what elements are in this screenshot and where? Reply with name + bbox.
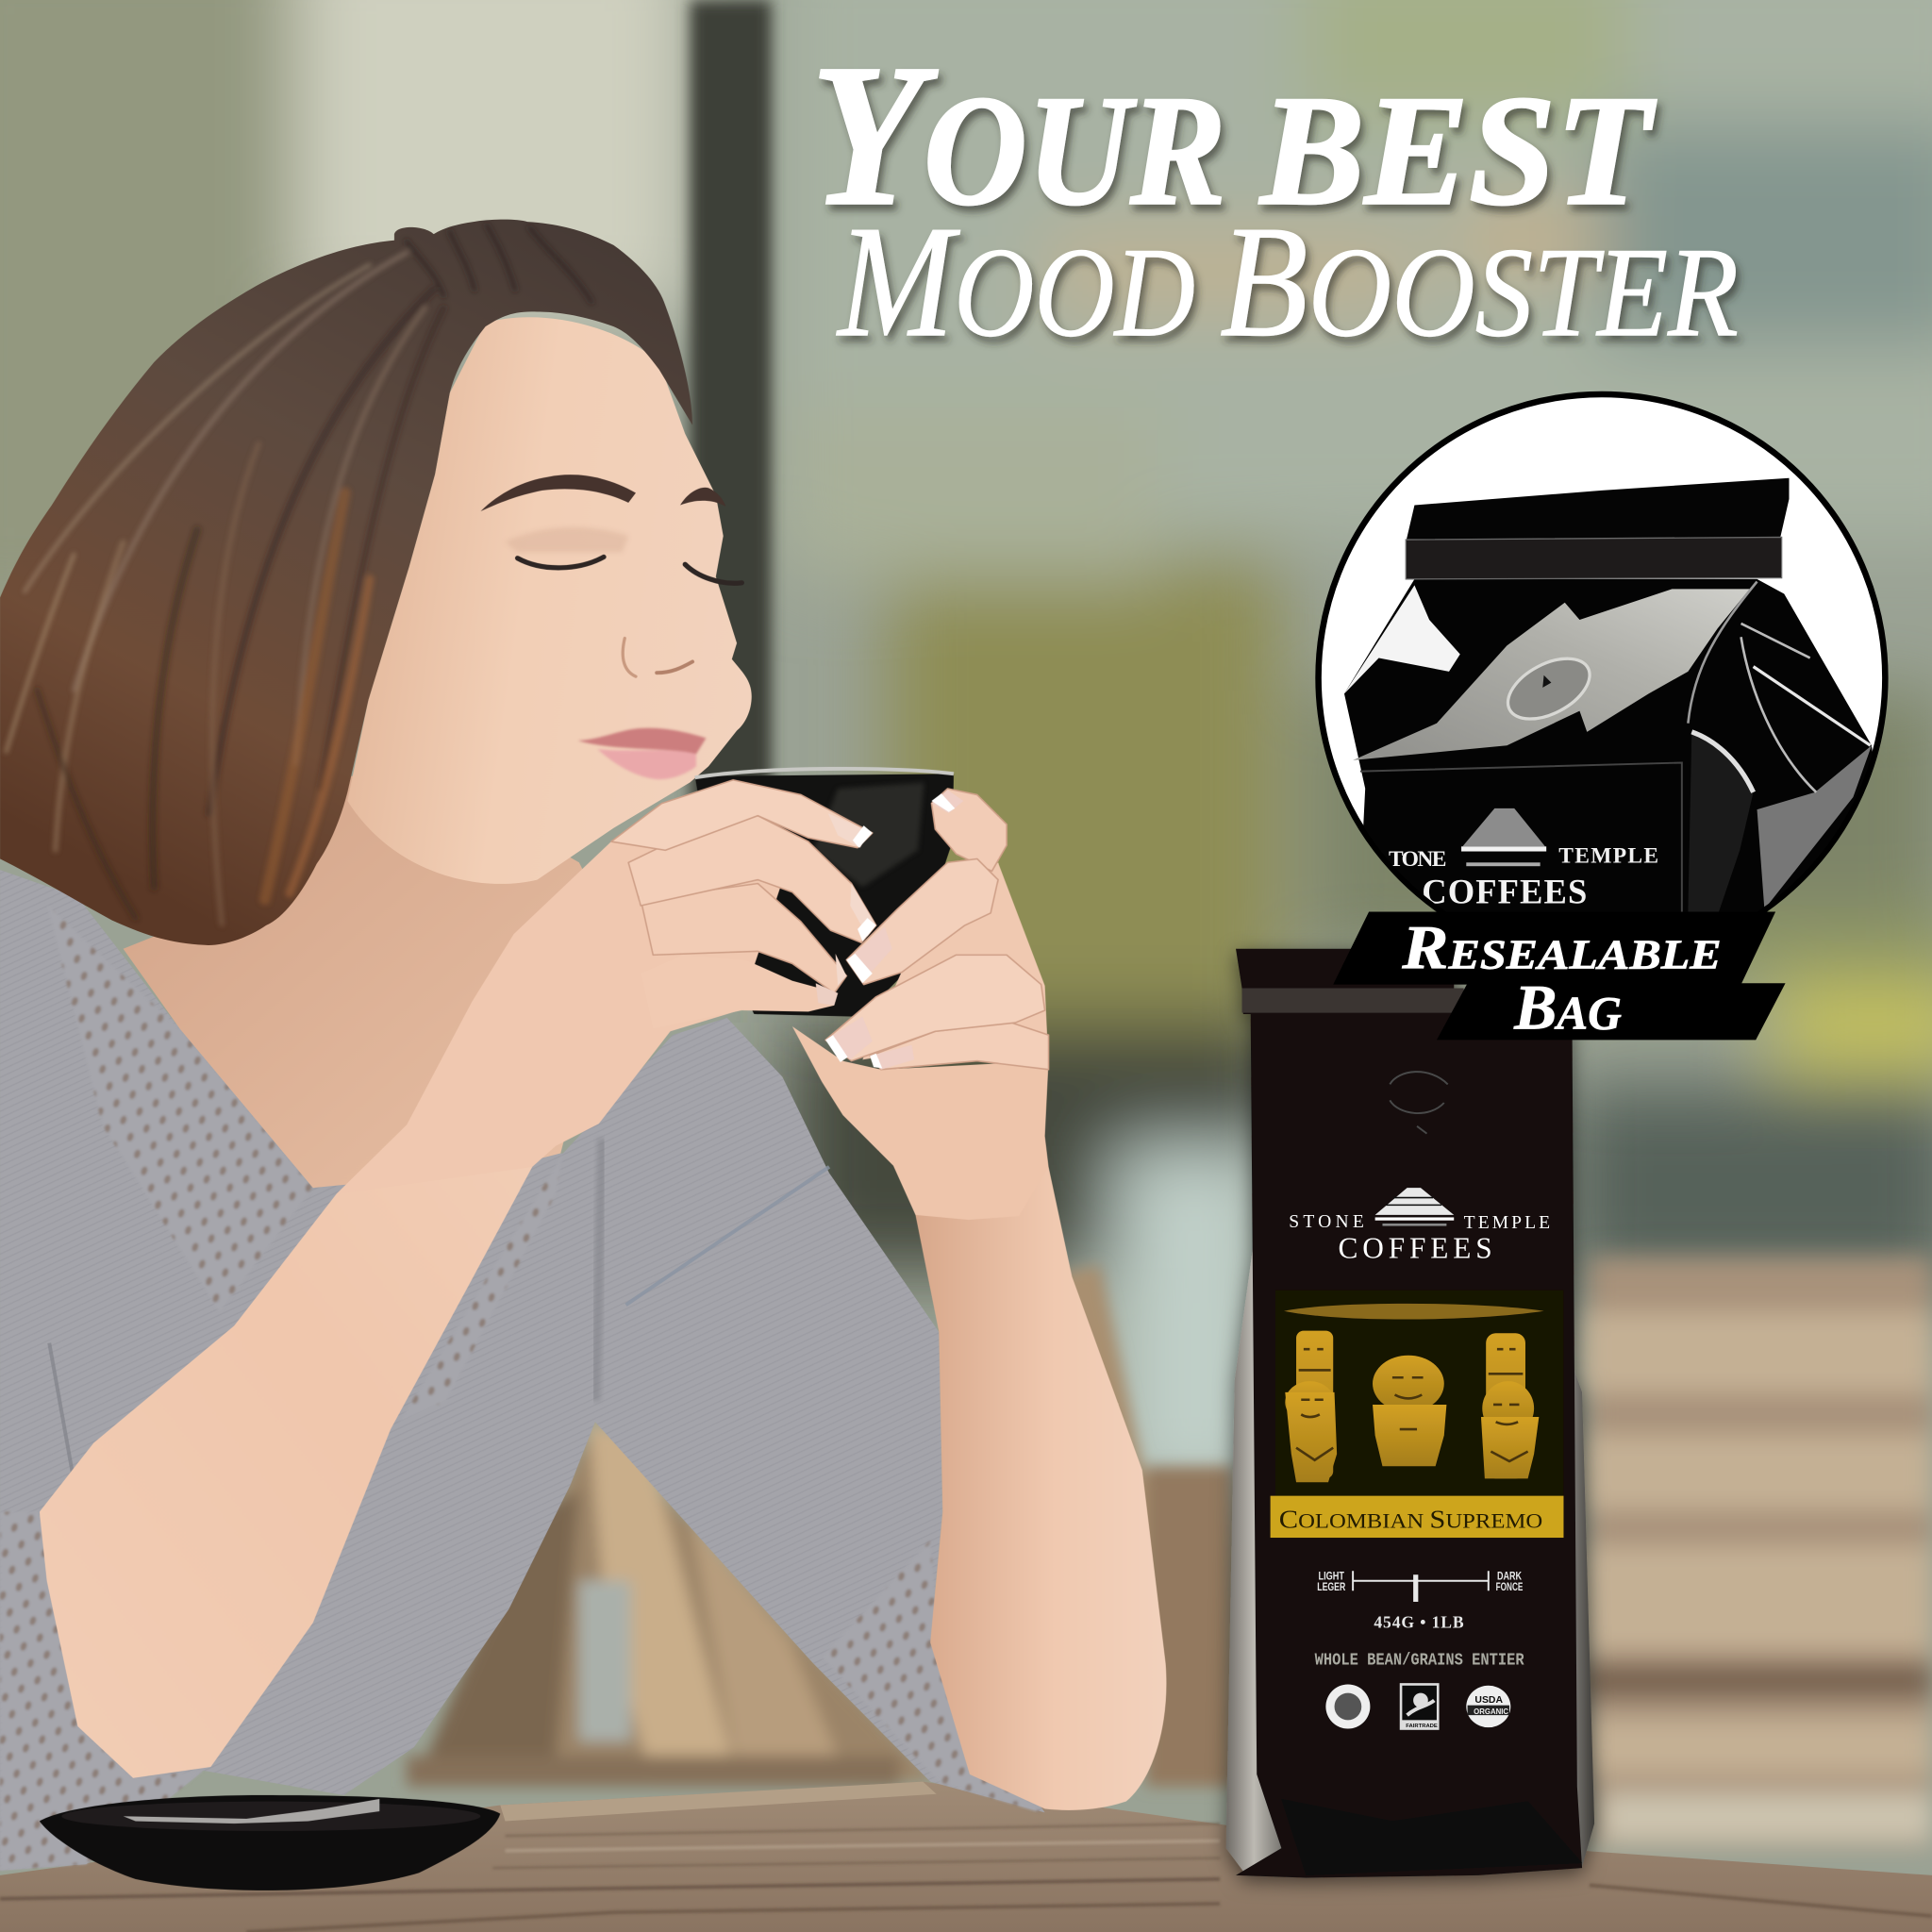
left hand (337, 780, 876, 1194)
label outline (1360, 762, 1682, 918)
certification badges (1325, 1683, 1510, 1730)
left forearm (40, 1124, 532, 1778)
left statue (1285, 1331, 1337, 1482)
roast scale (1317, 1569, 1523, 1602)
hair (0, 220, 692, 945)
variety band (1271, 1496, 1563, 1538)
zip strip (1242, 989, 1464, 1013)
neck and chest (124, 764, 616, 1188)
title (810, 23, 1739, 370)
bag logo: TEMPLE (1464, 1213, 1550, 1233)
title: YOUR (810, 23, 1226, 248)
bag body (1236, 949, 1582, 1878)
inset logo: TONE (1389, 847, 1446, 872)
variety band: COLOMBIAN SUPREMO (1279, 1506, 1542, 1534)
hair strands (7, 225, 591, 924)
sweater lace panels (0, 905, 1040, 1871)
film highlight (1353, 589, 1750, 760)
nose shadow (623, 639, 692, 676)
product bag (1226, 949, 1594, 1878)
degassing valve ring (1506, 657, 1591, 721)
center statue (1373, 1356, 1446, 1466)
bag shoulder and body (1344, 579, 1873, 911)
inset logo (1389, 808, 1658, 910)
resealable bag inset circle (1315, 391, 1889, 911)
callout ribbon: Resealable Bag: RESEALABLE (1401, 915, 1722, 983)
bag logo: COFFEES (1338, 1232, 1492, 1265)
roast scale: FONCE (1496, 1580, 1523, 1593)
inset logo: TEMPLE (1558, 843, 1658, 868)
bag side gussets (1226, 1220, 1306, 1873)
eyebrows (480, 475, 725, 511)
title: MOOD (836, 192, 1195, 370)
blurred wooden chairs (407, 1257, 1932, 1848)
eyelid shading (506, 527, 628, 552)
roast scale: LIGHT (1319, 1569, 1344, 1582)
right forearm (915, 1167, 1166, 1810)
roast scale: DARK (1497, 1569, 1522, 1582)
nails, left hand (816, 813, 876, 1006)
certification badges: USDA (1474, 1695, 1503, 1706)
face (347, 317, 752, 884)
callout ribbon: Resealable Bag: BAG (1513, 972, 1622, 1043)
saucer with spoon (40, 1795, 500, 1890)
callout ribbon: Resealable Bag (1333, 912, 1786, 1043)
woman (0, 220, 1166, 1871)
roast scale: LEGER (1317, 1580, 1345, 1593)
nails, right hand (825, 790, 963, 1070)
wooden table (0, 1782, 1932, 1932)
bag top seal (1406, 478, 1789, 542)
coffee cup (695, 769, 954, 1017)
certification badges: ORGANIC (1474, 1707, 1508, 1716)
bag logo: STONE (1289, 1212, 1364, 1232)
title: BEST (1258, 64, 1657, 239)
title: BOOSTER (1220, 192, 1739, 370)
weight: 454G • 1LB (1374, 1612, 1464, 1631)
left highlight (1344, 585, 1460, 693)
gusset folds (1757, 745, 1872, 909)
whole bean line: WHOLE BEAN/GRAINS ENTIER (1315, 1652, 1524, 1671)
lips (578, 728, 706, 779)
right statue (1481, 1333, 1539, 1478)
sweater (0, 870, 1045, 1871)
degassing valve (1390, 1072, 1448, 1134)
right hand (792, 789, 1049, 1220)
stone statues panel (1275, 1291, 1563, 1496)
certification badges: FAIRTRADE (1406, 1724, 1438, 1729)
closed eyes (518, 557, 741, 583)
inset logo: COFFEES (1422, 872, 1587, 910)
bag logo (1289, 1188, 1550, 1265)
zip band (1406, 537, 1782, 579)
